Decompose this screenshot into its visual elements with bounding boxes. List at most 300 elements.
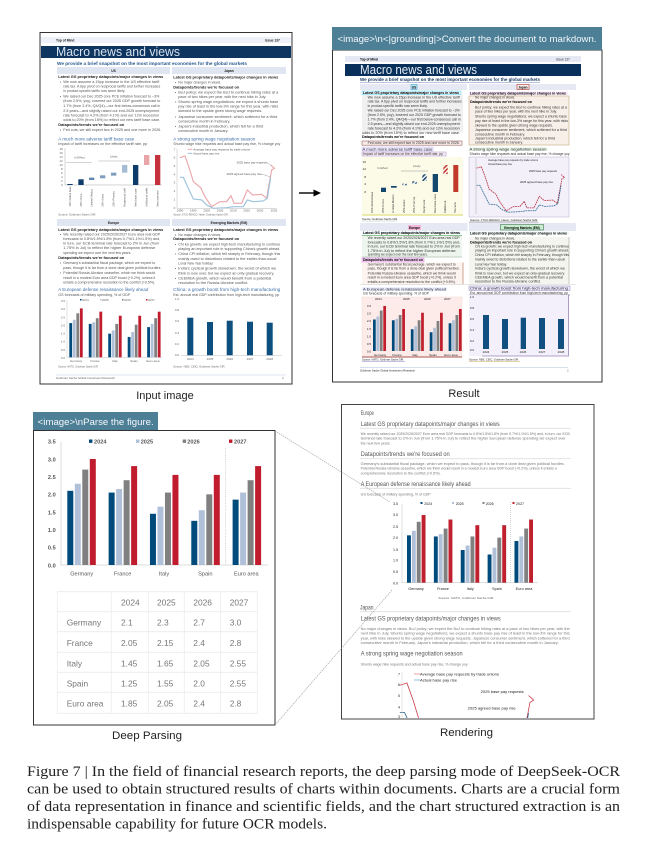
result box: Europe text: Latest GS proprietary datapoints/major changes in views [363, 231, 460, 235]
column: Europe: • [60, 232, 62, 236]
chart legend: 2025 [141, 440, 153, 446]
result title bar [345, 63, 581, 77]
rendering: wage line chart: 4 [398, 706, 400, 710]
column: Emerging Markets: • [175, 276, 177, 280]
document footer: Goldman Sachs Global Investment Research [56, 376, 115, 380]
chart: European defense bars: Source: NATO, Goldman Sachs GIR. [58, 364, 98, 368]
result box: Japan text: consecutive month in February. [475, 132, 525, 136]
result box: Europe text: in turn, our ECB terminal rate forecast to 2% in Jun (from [368, 245, 460, 249]
rendering: defense chart: 2.5 [393, 525, 398, 529]
chart: spring wage line chart: 1995 [190, 209, 197, 213]
chart: parsed figure: Italy [159, 572, 169, 578]
rendering: Japan section: consecutive month in February. Japan's industrial production, which fell for a third consecutive month in January. [361, 641, 559, 645]
result source lower [362, 358, 520, 362]
result box: US text: Latest GS proprietary datapoints/major changes in views [363, 91, 459, 95]
result box: Japan text: A strong spring wage negotiation season [470, 148, 546, 152]
result box: EM text: mainly owed to distortions related to the earlier-than-usual [475, 257, 565, 261]
column: Europe: GS forecasts of military spending, % of GDP [58, 293, 131, 297]
chart: China growth bars: 0.2 [175, 342, 179, 346]
caption: rendering: Rendering [440, 727, 493, 739]
chart: China growth bars: 2025 [207, 357, 214, 361]
result chart: tariff: 25% China [381, 199, 385, 213]
chart: spring wage line chart: 2 [174, 189, 176, 193]
rendering: Japan section [360, 604, 571, 667]
chart: European defense bars: Italy [112, 359, 118, 363]
chart: European defense bars: 0.0 [61, 356, 65, 360]
chart: tariff base case: 0 [61, 183, 63, 187]
result box: EM text: Lunar New Year holiday. [475, 262, 507, 266]
result chart: European defense: 3.0 [367, 304, 371, 308]
chart: China growth bars: 0.4 [175, 331, 179, 335]
rendering: defense chart: Euro area [516, 587, 533, 591]
chart: parsed figure: France [114, 572, 131, 578]
column: US: (from 2.5%, yoy), lowered our 2025 GDP growth forecast to [63, 99, 160, 103]
result chart: European defense: Spain [429, 353, 437, 357]
result chart: European defense [362, 297, 462, 357]
deep parsing prompt label: <image>\nParse the figure. [38, 417, 154, 427]
result column headers lower: Emerging Markets (EM) [504, 226, 540, 230]
rendering: defense chart: France [437, 587, 449, 591]
result chart: European defense: 2.0 [367, 319, 371, 323]
figure caption: of data representation in finance and scientific fields, and the chart structured extraction is an [27, 799, 621, 815]
chart: tariff base case: 6 [61, 171, 63, 175]
chart: parsed figure: Euro area [234, 572, 259, 578]
result title bar: Macro news and views [360, 63, 477, 77]
column: US: We raised our Dec 2025 core PCE inflation forecast to ~3% [63, 94, 159, 98]
rendering: Europe latest section: terminal rate forecast to 2% in Jun (from 1.75% in Jul) to reflect the higher European defense spending we expect over [361, 437, 567, 441]
result chart: tariff: 12 [363, 167, 366, 171]
result prompt label [332, 27, 602, 50]
result source lower: Source: NBS, CEIC, Goldman Sachs GIR. [469, 358, 519, 362]
result chart: European defense: 2027 [444, 297, 451, 301]
caption: input image: Input image [136, 390, 194, 402]
table: parsed values: 2.55 [230, 658, 246, 668]
column: Emerging Markets: India's cyclical growth slowdown, the worst of which we [178, 266, 276, 270]
result chart: European defense: Euro area [444, 353, 458, 357]
rendering: Europe datapoints section: Potential Russia-Ukraine ceasefire, which we think would result in a modest Euro area GDP boost (+0.2%), unless it entails a [361, 467, 557, 471]
result chart: European defense: 2026 [424, 297, 431, 301]
chart legend [89, 440, 246, 446]
result chart: tariff: Scenario [453, 202, 457, 213]
rendering: defense chart heading: GS forecasts of military spending, % of GDP [361, 492, 431, 496]
chart: tariff base case: Additional tariffs [145, 187, 149, 207]
rendering: Europe datapoints section [360, 451, 571, 475]
column: Japan: A strong spring wage negotiation season [173, 136, 256, 142]
rendering: wage line chart: Average base pay requests by trade unions [420, 672, 499, 676]
table: parsed values: Germany [67, 618, 102, 628]
result chart: tariff: 10% Global base [370, 191, 374, 213]
result box: EM text: No major changes in views. [475, 236, 515, 240]
chart: European defense bars: 2027 [148, 298, 155, 302]
deep parsing prompt label [33, 412, 158, 430]
column: Emerging Markets: Latest GS proprietary datapoints/major changes in views [173, 228, 278, 232]
rendering: Europe datapoints section: Datapoints/trends we're focused on [361, 451, 450, 458]
result column headers [360, 84, 576, 90]
result chart: tariff: Additional [443, 200, 447, 213]
rendering: Europe latest section: We recently raised our 2025/2026/2027 Euro area real GDP forecasts to 0.8%/1.5%/1.8% (from 0.7%/1.1%/1.5%) and, in turn, our ECB [361, 432, 570, 436]
chart: China growth bars: 2024 [187, 357, 194, 361]
result box: US text: We now assume a 15pp increase in the US effective tariff [368, 95, 460, 99]
table: parsed values: 2.4 [193, 638, 205, 648]
column: Europe: Europe [108, 221, 119, 225]
column: Europe: entails a comprehensive resolution to the conflict (+0.5%). [63, 280, 155, 284]
table: parsed values: 2.05 [121, 638, 138, 648]
table: parsed values: 2.7 [193, 618, 205, 628]
chart: spring wage line chart: 2005 [217, 209, 224, 213]
result chart: tariff: 25% Autos [402, 199, 406, 213]
rendering: defense chart: 0.0 [393, 582, 398, 586]
table: parsed values: 2027 [230, 597, 249, 607]
result column headers lower [360, 223, 576, 231]
result footer: 2 [567, 368, 569, 372]
rendering: defense chart: Spain [492, 587, 502, 591]
document footer: 2 [282, 376, 284, 380]
column: Emerging Markets: resolution to the Russia-Ukraine conflict. [178, 281, 248, 285]
result box: US text: Datapoints/trends we're focused on [362, 135, 424, 139]
document header band [41, 37, 291, 43]
result chart: tariff: New base case [433, 193, 437, 213]
result box: US text: Fed cuts; we still expect two in 2025 and one more in 2026. [368, 141, 460, 145]
source notes upper: Source: JTUC-RENGO, Haver, Goldman Sachs GIR. [173, 212, 228, 216]
chart: spring wage line chart: 5 [174, 164, 176, 168]
column: US: We now assume a 15pp increase in the US effective tariff [63, 80, 159, 84]
result box: US text: rate tax. A 6pp pivot on reciprocal tariffs and further increases [368, 100, 462, 104]
column: Europe: pass, though it is far from a done deal given political hurdles. [63, 266, 161, 270]
column: Emerging Markets: • [175, 252, 177, 256]
result box: Europe text: result in a modest Euro area GDP boost (+0.2%), unless it [368, 276, 456, 280]
table: parsed values: 2024 [121, 597, 140, 607]
result chart: European defense: Germany [374, 353, 387, 357]
result chart: China growth: 2027 [539, 350, 546, 354]
chart: parsed figure: Germany [70, 572, 93, 578]
document title bar [41, 44, 291, 59]
result source notes [362, 217, 538, 222]
result chart: China growth: 0.4 [470, 328, 474, 332]
result chart: tariff: Limited Mexico [391, 194, 395, 213]
rendering: defense chart: 2025 [456, 502, 464, 506]
source notes upper: Source: Goldman Sachs GIR. [58, 212, 96, 216]
result box: Europe text: forecasts to 0.8%/1.5%/1.8% (from 0.7%/1.1%/1.5%) and, [368, 240, 460, 244]
chart: spring wage line chart: 1990 [177, 209, 184, 213]
result box: Europe text: Datapoints/trends we're focused on [363, 258, 423, 262]
rendering: defense chart: 3.5 [393, 502, 398, 506]
rendering: defense chart [393, 502, 538, 600]
chart: China growth bars: 0.6 [175, 319, 179, 323]
result box: Europe text: spending we expect over the next few years. [368, 253, 428, 257]
rendering: defense chart heading [360, 481, 571, 496]
chart: European defense bars: France [90, 359, 100, 363]
rendering: Europe datapoints section: Germany's substantial fiscal package, which we expect to pass, though it is far from a done deal given political hurdles. [361, 462, 565, 466]
chart: European defense bars: 0.5 [61, 348, 65, 352]
column: US: Impact of tariff increases on the effective tariff rate, pp [58, 142, 147, 146]
result box: Europe text: Potential Russia-Ukraine ceasefire, which we think would [368, 272, 456, 276]
chart: spring wage line chart: 6 [174, 156, 176, 160]
column: Europe: We recently raised our 2025/2026/2027 Euro area real GDP [63, 232, 161, 236]
rendering: wage line chart: 2025 agreed base pay rise [468, 706, 516, 710]
chart: spring wage line chart: 3 [174, 181, 176, 185]
rendering: defense chart heading: A European defense renaissance likely ahead [361, 481, 471, 488]
chart: tariff base case: Limited Mexico [90, 188, 94, 207]
result chart: China growth: 2026 [520, 350, 527, 354]
column: Japan: No major changes in views. [178, 80, 221, 84]
chart: China growth bars [173, 297, 282, 368]
column: Japan: Japan's industrial production, which fell for a third [178, 124, 263, 128]
chart: spring wage line chart: 4 [174, 172, 176, 176]
chart: European defense bars: 2026 [124, 298, 131, 302]
column: Japan: Japan [224, 69, 234, 73]
result box: Europe text: Germany's substantial fiscal package, which we expect to [368, 262, 456, 266]
result chart: China growth: 0.8 [470, 306, 474, 310]
column: Japan: Japanese consumer sentiment, which softened for a third [178, 115, 277, 119]
chart: China growth bars: Source: NBS, CEIC, Goldman Sachs GIR. [173, 364, 225, 368]
chart: tariff base case: 8 [61, 167, 63, 171]
column: US: A much more adverse tariff base case [58, 136, 135, 142]
chart: spring wage line chart: 7 [174, 147, 176, 151]
result box: EM text: China CPI inflation, which fell sharply in February, though this [475, 253, 569, 257]
table: parsed values: 2.15 [157, 638, 174, 648]
rendering: wage line chart: 2025 base pay requests [481, 690, 524, 694]
result box: Europe text: pass, though it is far from a done deal given political hurdles. [368, 266, 460, 270]
result box: Japan text: Datapoints/trends we're focused on [470, 100, 532, 104]
chart: spring wage line chart [174, 147, 278, 213]
result box: EM text: Datapoints/trends we're focused on [470, 241, 532, 245]
rendering: defense chart: 1.5 [393, 548, 398, 552]
table: parsed values: 2.05 [193, 658, 210, 668]
column: Japan: Shunto spring wage negotiations; we expect a shunto base [178, 100, 278, 104]
document subtitle: We provide a brief snapshot on the most important economies for the global markets [57, 61, 247, 66]
result box: Europe text [362, 231, 463, 296]
figure caption: Figure 7 | In the field of financial research reports, the deep parsing mode of DeepSeek-OCR [27, 764, 620, 780]
result column headers lower: Europe [409, 226, 420, 230]
chart: spring wage line chart: 2025 agreed base pay rise [227, 172, 262, 176]
result chart: China growth: 2025 [502, 350, 509, 354]
result chart: tariff: 25% Pharma [412, 196, 416, 213]
chart: China growth bars: 2026 [226, 357, 233, 361]
column: US: • [60, 94, 62, 98]
figure caption [27, 764, 621, 832]
chart: tariff base case: 10% Global base [68, 186, 72, 207]
column: Emerging Markets: China: a growth boost from high-tech manufacturing [173, 287, 281, 292]
table: parsed values: Euro area [67, 699, 104, 709]
column: Emerging Markets: Est. annual real GDP contribution from high-tech manufacturing, pp [173, 293, 279, 297]
result chart: line: Average base pay requests by trade unions [488, 158, 538, 162]
column: Europe: Latest GS proprietary datapoints/major changes in views [58, 228, 163, 232]
caption: result: Result [448, 388, 480, 400]
result chart: tariff: In Effect [377, 166, 388, 170]
result box: US text: 1.7% (from 2.4%, Q4/Q4)—our first below-consensus call in [368, 117, 461, 121]
table: parsed values: 1.85 [121, 699, 138, 709]
table: parsed values: Spain [67, 678, 88, 688]
column: Emerging Markets: Datapoints/trends we're focused on [173, 237, 239, 241]
column: Emerging Markets: Emerging Markets (EM) [211, 221, 247, 225]
rendering: wage line chart: 6 [398, 683, 400, 687]
chart: spring wage line chart: Actual base pay rise [193, 151, 220, 155]
table: parsed values: 2025 [157, 597, 176, 607]
rendering: Europe latest section: Latest GS proprietary datapoints/major changes in views [361, 421, 500, 428]
result chart: China growth: 1.0 [470, 295, 474, 299]
result box: US text: rate forecast to 4.2% (from 4.1%) and our 12m recession [368, 126, 460, 130]
column: Japan: • [175, 124, 177, 128]
result box: Japan text: pay rise of least in the low-3% range for this year, with risks [475, 119, 568, 123]
chart: tariff base case [59, 147, 162, 207]
rendering: wage line chart: 5 [398, 694, 400, 698]
column: Europe [57, 219, 170, 297]
chart: tariff base case: Likely [110, 154, 118, 158]
rendering: Europe latest section: the next few years. [361, 441, 391, 445]
column: Europe: Datapoints/trends we're focused on [58, 256, 124, 260]
chart: tariff base case: 25% China [79, 193, 83, 207]
result box: EM text: think is now over, but we expect an only-gradual recovery. [475, 271, 565, 275]
document header band: Top of Mind [56, 38, 74, 42]
rendering: Japan section: next hike in July. Shunto spring wage negotiations; we expect a shunto base pay rise of least in the low-3% range for this [361, 632, 570, 636]
chart: China growth bars: 0.8 [175, 308, 179, 312]
result box: US text [362, 91, 463, 156]
panel: result [332, 27, 602, 382]
chart: parsed figure: 2.0 [48, 493, 56, 499]
figure caption: indispensable capability for future OCR models. [27, 816, 327, 832]
column: US: Latest GS proprietary datapoints/major changes in views [58, 75, 163, 79]
caption: deep parsing: Deep Parsing [112, 730, 182, 742]
column: Japan: skewed to the upside given strong wage requests. [178, 109, 262, 113]
chart: parsed figure: 0.0 [48, 563, 56, 569]
table: parsed values: France [67, 638, 93, 648]
result box: US text: in product-specific tariffs now seem likely. [368, 104, 428, 108]
rendering: Japan section: year, with risks skewed to the upside given strong wage requests. Japanese consumer sentiment, which softened for a third [361, 636, 570, 640]
result chart: China growth [469, 295, 568, 356]
column: Japan: • [175, 100, 177, 104]
chart: spring wage line chart: 1 [174, 197, 176, 201]
rendering: defense chart: Source: NATO, Goldman Sachs GIR. [438, 596, 494, 600]
document footer [56, 375, 286, 380]
rendering: Japan section: No major changes in views. BoJ policy; we expect the BoJ to continue hiking rates at a pace of two hikes per year, with the [361, 627, 570, 631]
result chart: tariff: 4 [364, 182, 366, 186]
result chart: tariff: 0 [364, 190, 366, 194]
chart: European defense bars: Euro area [146, 359, 160, 363]
chart: tariff base case: 25% Autos [101, 193, 105, 207]
result source notes: Source: Goldman Sachs GIR. [362, 217, 398, 221]
column: US [57, 67, 170, 146]
result chart: tariff [362, 157, 463, 215]
result subtitle: We provide a brief snapshot on the most important economies for the global markets [360, 77, 541, 82]
rendering: defense chart: 0.5 [393, 570, 398, 574]
result box: EM text: CEEMEA growth, which would benefit from a potential [475, 276, 563, 280]
table: parsed values: Italy [67, 658, 83, 668]
chart: European defense bars [58, 298, 162, 368]
column: Emerging Markets: No major changes in views. [178, 233, 221, 237]
chart: spring wage line chart: 2020 [257, 209, 264, 213]
result chart: European defense: 1.5 [367, 327, 371, 331]
source notes upper [58, 212, 228, 216]
table: parsed values: 2.55 [230, 678, 246, 688]
result box: Japan text: Latest GS proprietary datapoints/major changes in views [470, 92, 566, 96]
chart: tariff base case: New base case [134, 188, 138, 207]
rendering: defense chart: Italy [467, 587, 474, 591]
chart: China growth bars: 2028 [266, 357, 273, 361]
column: US: Fed cuts; we still expect two in 2025 and one more in 2026. [63, 128, 161, 132]
result box: EM text: resolution to the Russia-Ukraine conflict. [475, 280, 541, 284]
rendering: wage line chart: Actual base pay rise [420, 678, 457, 682]
result box: Europe text: A European defense renaissance likely ahead [363, 288, 446, 292]
column: Emerging Markets: mainly owed to distortions related to the earlier-than-usual [178, 257, 277, 261]
column: Japan: • [175, 115, 177, 119]
result chart: line [469, 157, 569, 217]
column: Europe: • [60, 271, 62, 275]
chart: European defense bars: Spain [130, 359, 138, 363]
chart: European defense bars: 1.5 [61, 332, 65, 336]
column: Japan: Datapoints/trends we're focused on [173, 86, 239, 90]
table: parsed values: 2.3 [157, 618, 169, 628]
chart: parsed figure: 2.5 [48, 475, 56, 481]
column: Emerging Markets: • [175, 233, 177, 237]
chart: European defense bars: 2025 [102, 298, 109, 302]
result chart: European defense: Italy [412, 353, 418, 357]
result chart: tariff: Likely [413, 164, 421, 168]
document title bar: Macro news and views [56, 44, 180, 59]
result box: Japan text: skewed to the upside given strong wage requests. [475, 124, 553, 128]
result chart: tariff: Reciprocal [422, 199, 426, 213]
chart: spring wage line chart: 2025 [271, 209, 278, 213]
chart: tariff base case: 16 [59, 151, 63, 155]
column: Europe: 1.75% in Jul) to reflect the higher European defense [63, 246, 155, 250]
chart: European defense bars: 3.0 [61, 307, 65, 311]
panel: input image [40, 32, 292, 384]
rendering: Japan section: Latest GS proprietary datapoints/major changes in views [361, 616, 501, 623]
result prompt label: <image>\n<|grounding|>Convert the document to markdown. [338, 33, 596, 44]
chart: European defense bars: 2024 [82, 298, 89, 302]
column: Japan: consecutive month in February. [178, 120, 230, 124]
result box: EM text [360, 232, 576, 295]
chart legend: 2024 [94, 440, 107, 446]
result box: Europe text: GS forecasts of military spending, % of GDP [363, 292, 429, 296]
chart: European defense bars: 3.5 [61, 299, 65, 303]
result box: EM text: playing an important role in supporting China's growth ahead. [475, 249, 569, 253]
result header band: Issue 137 [556, 58, 570, 62]
document header band: Issue 137 [265, 38, 280, 42]
column: Emerging Markets: Lunar New Year holiday. [178, 262, 213, 266]
column: Europe: • [60, 261, 62, 265]
column: Japan: pace of two hikes per year, with the next hike in July. [178, 95, 266, 99]
table: parsed values: 2.0 [193, 678, 205, 688]
rendering: Europe heading: Europe [361, 410, 374, 417]
rendering: wage line chart [398, 672, 534, 718]
column: US: 1.7% (from 2.4%, Q4/Q4)—our first below-consensus call in [63, 104, 160, 108]
column: Emerging Markets: playing an important role in supporting China's growth ahead. [178, 247, 280, 251]
result box: Japan text: Shunto wage hike requests and actual base pay rise, % change yoy [470, 152, 570, 156]
result box: US text: (from 2.5%, yoy), lowered our 2025 GDP growth forecast to [368, 113, 461, 117]
result chart: tariff: 16 [363, 160, 366, 164]
column: US: US [111, 69, 117, 73]
rendering: defense chart: 2024 [424, 502, 432, 506]
table: parsed values [57, 592, 257, 713]
column: US: • [60, 128, 62, 132]
chart: spring wage line chart: 2015 [243, 209, 250, 213]
rendering: Japan section: A strong spring wage negotiation season [361, 650, 463, 657]
column: US: in product-specific tariffs now seem likely. [63, 89, 125, 93]
column: US: rate tax. A 6pp pivot on reciprocal tariffs and further increases [63, 84, 161, 88]
chart: tariff base case: In Effect [74, 156, 85, 160]
result box: Japan text [469, 92, 570, 156]
result box: Japan text: Japan's industrial production, which fell for a third [475, 136, 555, 140]
chart: European defense bars: 1.0 [61, 340, 65, 344]
column: Europe: Potential Russia-Ukraine ceasefire, which we think would [63, 271, 155, 275]
table: parsed values: 2.8 [230, 638, 242, 648]
result chart: China growth: 0.0 [470, 348, 474, 352]
figure caption: can be used to obtain structured results of charts within documents. Charts are a crucial form [27, 782, 621, 798]
table: parsed values: 1.25 [121, 678, 138, 688]
rendering: Europe datapoints section: comprehensive resolution to the conflict (+0.5%). [361, 471, 441, 475]
column: Emerging Markets: CEEMEA growth, which would benefit from a potential [178, 276, 272, 280]
column: Europe: in turn, our ECB terminal rate forecast to 2% in Jun (from [63, 242, 160, 246]
